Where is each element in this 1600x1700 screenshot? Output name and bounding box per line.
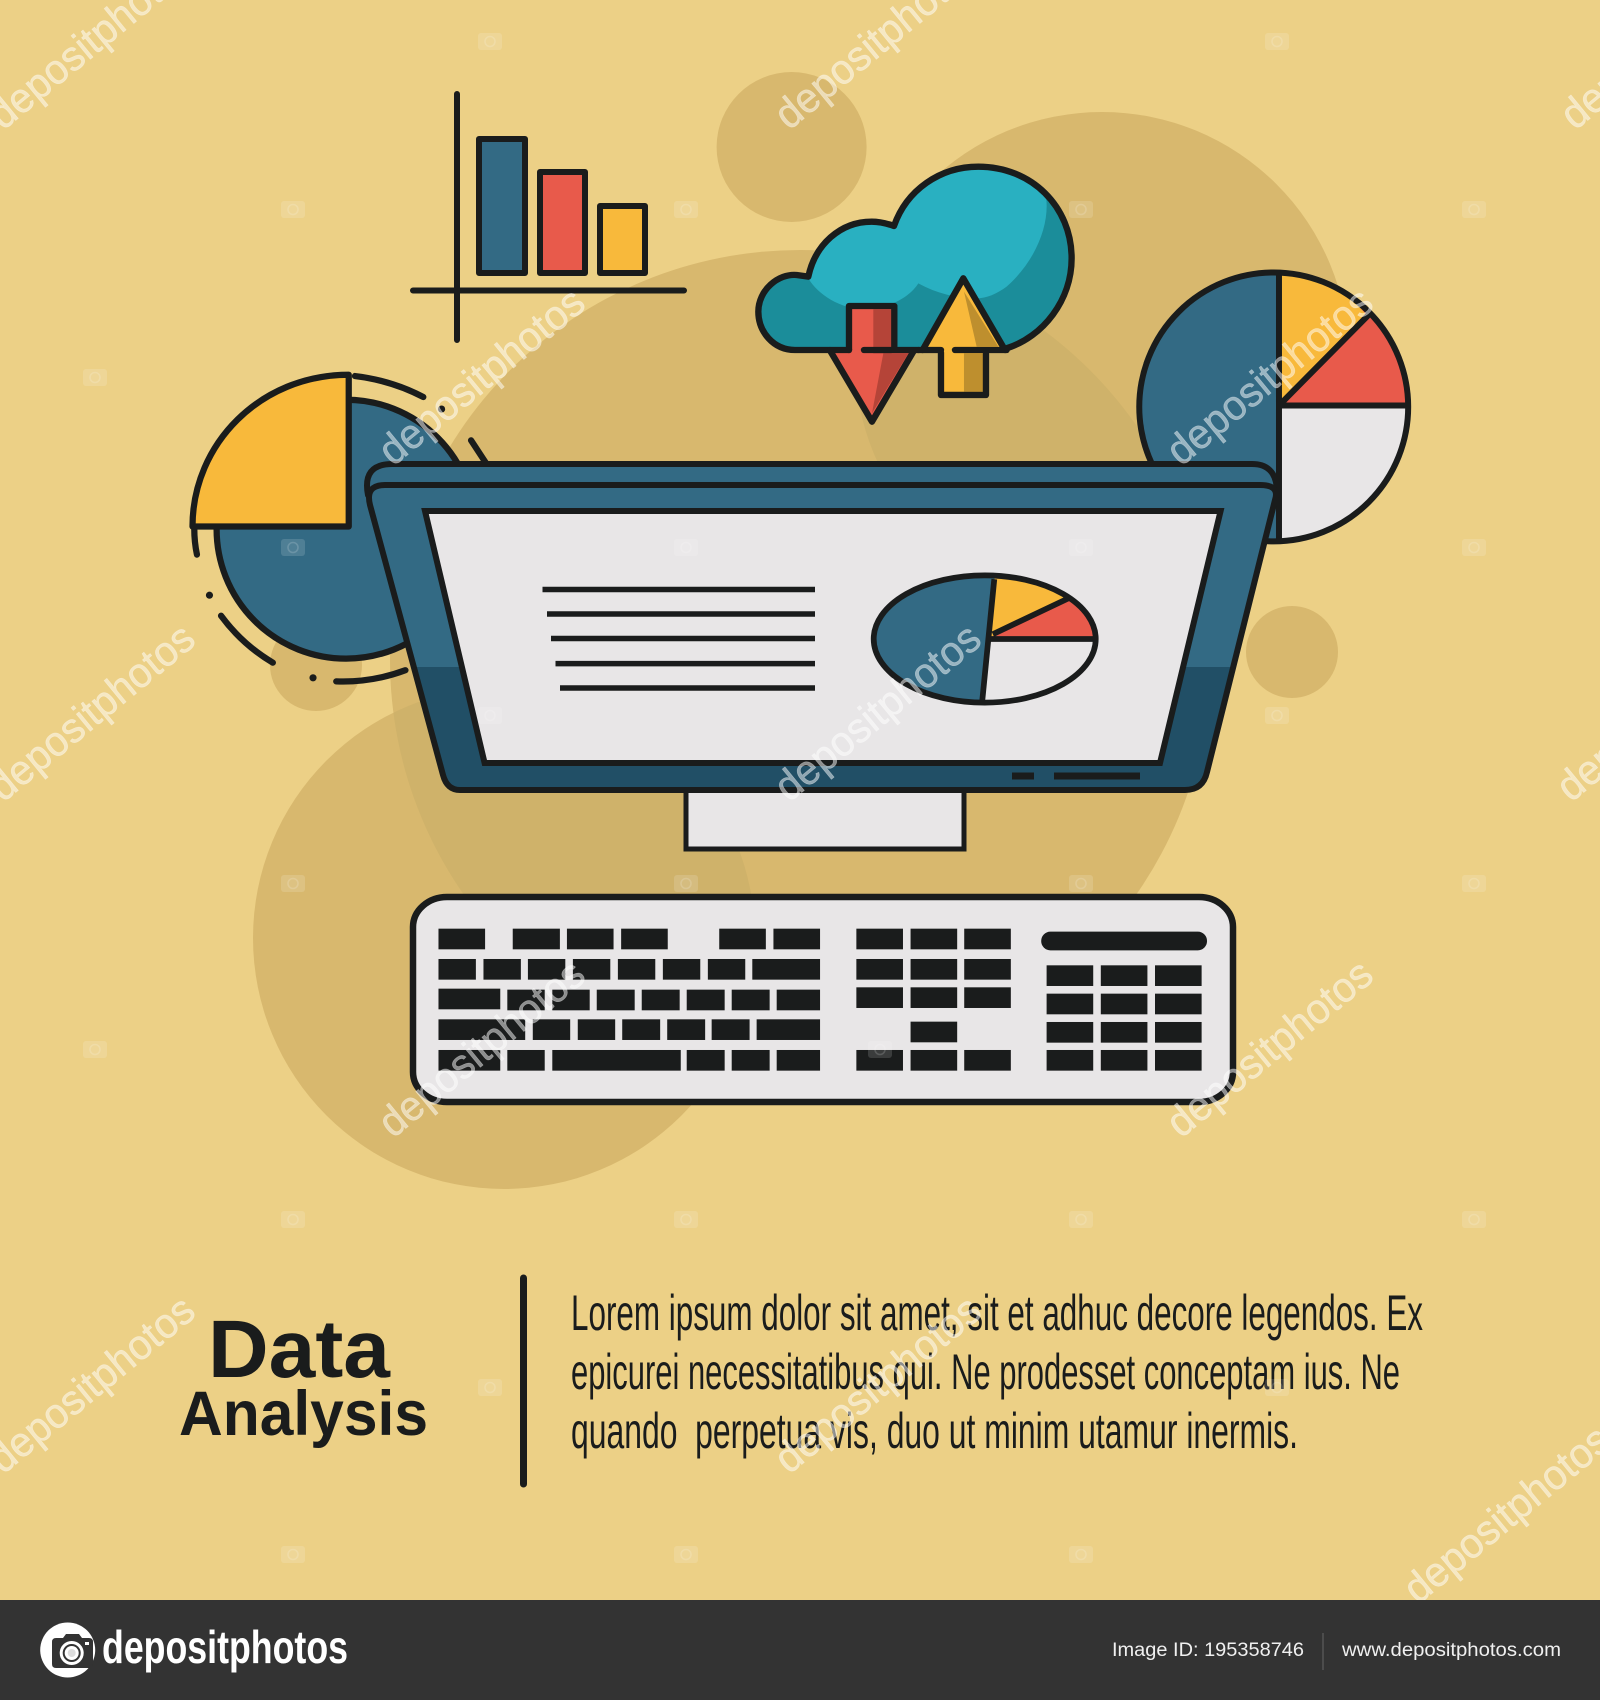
monitor stand: [686, 785, 964, 849]
footer logo text: depositphotos: [102, 1621, 348, 1673]
monitor buttons: [1012, 772, 1140, 780]
watermarks: depositphotos: [369, 278, 593, 474]
watermarks: depositphotos: [1157, 950, 1381, 1146]
footer separator: [1322, 1633, 1324, 1670]
bar chart: [413, 94, 684, 340]
watermark cameras: [83, 33, 1486, 1563]
website: www.depositphotos.com: [1341, 1640, 1561, 1661]
watermarks: depositphotos: [1157, 278, 1381, 474]
right pie chart: [1131, 266, 1418, 549]
orbit dots: [206, 406, 445, 681]
title: Data Analysis: Analysis: [179, 1379, 428, 1449]
keyboard: [413, 897, 1233, 1102]
watermarks: depositphotos: [369, 950, 593, 1146]
watermarks: depositphotos: [765, 614, 989, 810]
red bar: [540, 172, 585, 273]
watermarks: depositphotos: [765, 1286, 989, 1482]
vertical divider: [520, 1278, 527, 1484]
pie outline: [1139, 272, 1408, 541]
monitor: [360, 464, 1290, 797]
blue pie base: [217, 400, 476, 659]
chart axes: [413, 94, 684, 340]
left pie chart: [192, 375, 488, 682]
yellow bar: [600, 206, 645, 273]
slices: [1142, 276, 1406, 538]
footer bar: [0, 1600, 1600, 1700]
screen: [425, 511, 1221, 763]
footer logo icon: [40, 1622, 95, 1678]
image id: Image ID: 195358746: [1112, 1640, 1304, 1661]
bezel outline: [369, 485, 1276, 790]
cloud highlight: [808, 167, 1047, 310]
title: Data Analysis: Data: [208, 1304, 391, 1395]
yellow slice: [192, 375, 349, 526]
bezel shadow: [417, 667, 1230, 787]
blue bar: [479, 139, 525, 273]
cloud with arrows: [758, 167, 1072, 422]
orbit dashes: [194, 376, 488, 682]
keyboard body: [413, 897, 1233, 1102]
cloud: [758, 167, 1072, 350]
mini pie chart on screen: [867, 572, 1100, 706]
background circles: [253, 72, 1349, 1189]
cloud outline: [758, 167, 1072, 350]
download arrow: [830, 306, 918, 422]
text lines on screen: [542, 590, 815, 688]
keys: [438, 929, 1207, 1071]
monitor front bezel: [369, 485, 1276, 790]
upload arrow: [918, 278, 1007, 395]
body text: [571, 1285, 1423, 1459]
monitor back rim: [367, 464, 1277, 495]
title: Data Analysis: [179, 1304, 428, 1449]
